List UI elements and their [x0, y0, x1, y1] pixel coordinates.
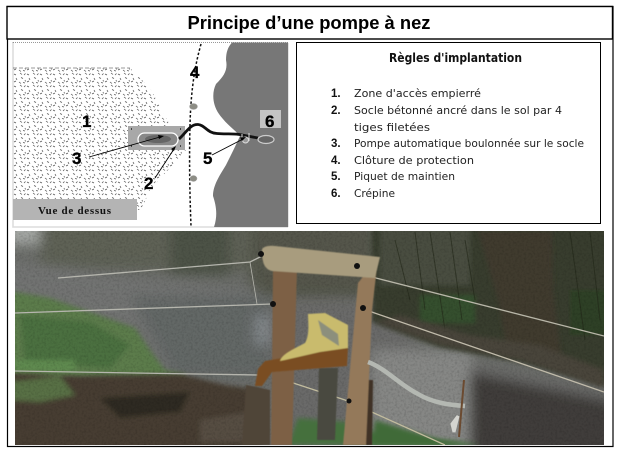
anchor stake [242, 133, 249, 143]
intake hose [368, 362, 465, 406]
background trees [15, 231, 373, 300]
view caption: Vue de dessus [38, 205, 112, 217]
far bank [375, 315, 604, 388]
pump [138, 133, 178, 146]
hose [179, 124, 258, 139]
branches [395, 232, 600, 340]
wooden posts [242, 246, 380, 445]
rules list: 3. [331, 138, 341, 150]
panel: top view diagram [13, 42, 288, 227]
rules list: Pompe automatique boulonnée sur le socle [354, 137, 584, 150]
rules list: Piquet de maintien [354, 170, 455, 183]
water [15, 264, 604, 445]
callout arrows [89, 137, 243, 178]
diagram numbers: 1 [82, 112, 91, 131]
rules list: Zone d'accès empierré [354, 87, 481, 100]
label background 6 [260, 110, 281, 128]
diagram numbers [72, 63, 274, 193]
rules list: 5. [331, 171, 341, 183]
strainer [258, 136, 274, 144]
river [213, 42, 288, 227]
pump body [255, 313, 348, 386]
gravel access zone [13, 68, 186, 210]
diagram numbers: 6 [265, 112, 274, 131]
fence line [190, 44, 201, 226]
rules heading: Règles d'implantation [389, 51, 522, 65]
texture overlay [15, 231, 604, 445]
panel: implantation rules [296, 42, 600, 224]
diagram numbers: 3 [72, 149, 81, 168]
rules list: Clôture de protection [354, 154, 474, 167]
fence wires [15, 256, 604, 445]
rules list: 1. [331, 88, 341, 100]
title banner [7, 6, 612, 39]
green bank [5, 290, 185, 378]
rules list: 2. [331, 105, 341, 117]
diagram numbers: 2 [144, 174, 153, 193]
diagram numbers: 5 [203, 149, 212, 168]
stake and strainer [459, 380, 464, 437]
view caption [13, 199, 137, 220]
insulators [258, 251, 366, 404]
forest on far bank [370, 231, 604, 386]
rules list: 4. [331, 155, 341, 167]
rules list: Crépine [354, 187, 395, 200]
title banner: Principe d’une pompe à nez [188, 13, 430, 33]
rules list [331, 87, 584, 200]
tree trunk [484, 234, 556, 347]
concrete slab [128, 126, 185, 150]
slab bolts [131, 129, 181, 146]
rules list: Socle bétonné ancré dans le sol par 4 [354, 104, 562, 117]
rules list: tiges filetées [354, 121, 430, 134]
photo: nose pump by the river [15, 231, 604, 445]
fence posts [190, 104, 198, 182]
diagram numbers: 4 [190, 63, 200, 82]
rules list: 6. [331, 188, 341, 200]
foreground grass [288, 418, 480, 445]
muddy ground [15, 372, 262, 445]
